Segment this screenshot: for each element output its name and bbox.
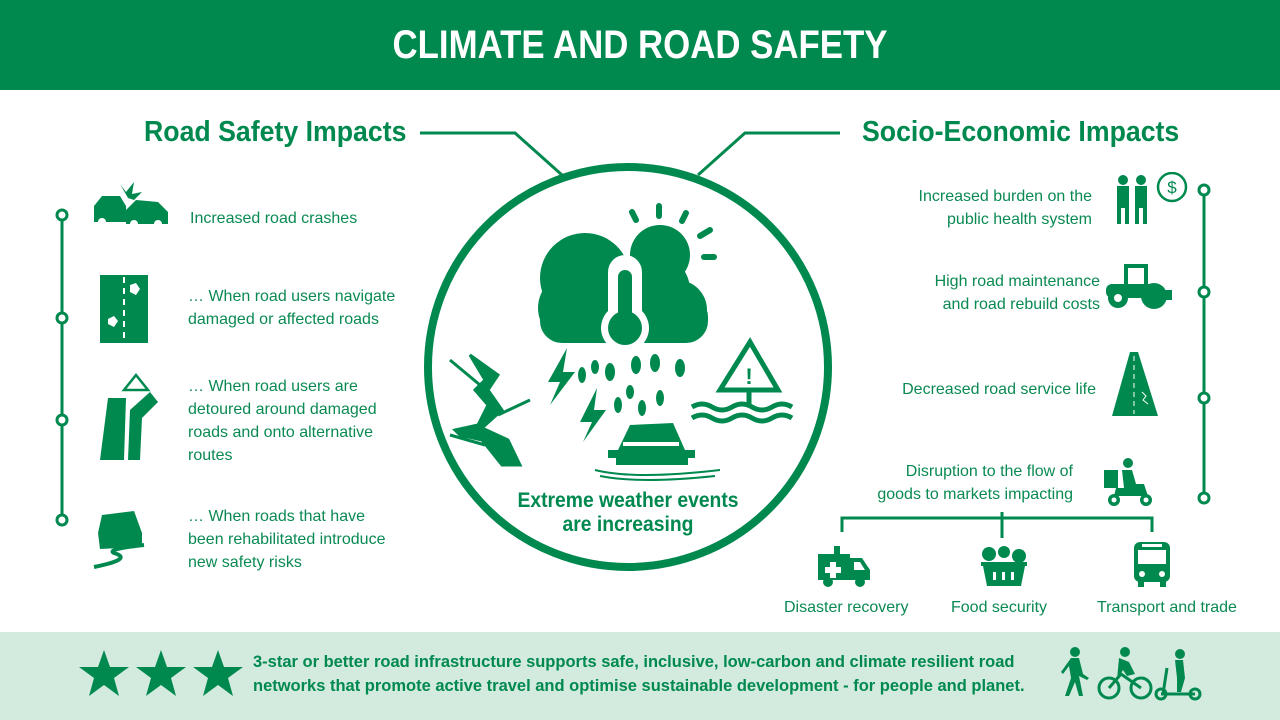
icon: crash bbox=[94, 182, 168, 224]
left item 3: detours bbox=[100, 373, 377, 464]
right item 3: service life bbox=[902, 352, 1158, 416]
heading: socio-economic impacts: Socio-Economic Impacts bbox=[862, 116, 1179, 148]
sub item: transport and trade: Transport and trade bbox=[1097, 599, 1237, 616]
footer text: 3-star or better road infrastructure supports safe, inclusive, low-carbon and climate resilient road bbox=[253, 652, 1014, 671]
left item 4: rehabilitated roads: new safety risks bbox=[188, 554, 302, 571]
header banner bbox=[0, 0, 1280, 90]
right item 4: goods flow bbox=[877, 458, 1152, 506]
caption: are increasing bbox=[563, 513, 693, 536]
right item 4: goods flow: Disruption to the flow of bbox=[906, 463, 1073, 480]
caption: Extreme weather events bbox=[518, 489, 738, 512]
icon: bus bbox=[1134, 542, 1170, 587]
right item 2: maintenance bbox=[935, 264, 1172, 313]
icon: road roller bbox=[1106, 264, 1172, 309]
title: CLIMATE AND ROAD SAFETY bbox=[393, 23, 887, 67]
left item 3: detours: … When road users are bbox=[188, 378, 358, 395]
left item 3: detours: roads and onto alternative bbox=[188, 424, 373, 441]
icon: warning sign and waves bbox=[692, 342, 792, 421]
left item 2: damaged roads: damaged or affected roads bbox=[188, 311, 379, 328]
icon: people and dollar bbox=[1117, 172, 1188, 224]
icon: cracked ground bbox=[450, 355, 530, 465]
icon: car on winding road bbox=[94, 511, 144, 569]
icon: walker cyclist scooter bbox=[1061, 647, 1202, 700]
footer text: networks that promote active travel and optimise sustainable development - for people and planet. bbox=[253, 676, 1025, 695]
caption bbox=[518, 489, 738, 536]
icon: people and dollar: $ bbox=[1167, 178, 1177, 197]
left item 3: detours: routes bbox=[188, 447, 232, 464]
footer text bbox=[253, 652, 1025, 695]
sub item: food security bbox=[951, 546, 1047, 616]
icon: three stars bbox=[79, 650, 243, 696]
icon: cloud with thermometer bbox=[538, 233, 708, 352]
left item 2: damaged roads bbox=[100, 275, 395, 343]
icon: ambulance bbox=[818, 546, 870, 587]
icon: basket of vegetables bbox=[981, 546, 1027, 586]
left item 1: crashes bbox=[94, 182, 357, 227]
left item 4: rehabilitated roads bbox=[94, 508, 385, 571]
sub item: food security: Food security bbox=[951, 599, 1047, 616]
icon: sun bbox=[630, 206, 714, 285]
right item 1: health bbox=[919, 172, 1188, 228]
left item 4: rehabilitated roads: … When roads that have bbox=[188, 508, 365, 525]
right item 4: goods flow: goods to markets impacting bbox=[877, 486, 1073, 503]
footer band bbox=[0, 632, 1280, 720]
left item 3: detours: detoured around damaged bbox=[188, 401, 377, 418]
left item 2: damaged roads: … When road users navigate bbox=[188, 288, 395, 305]
heading: road safety impacts: Road Safety Impacts bbox=[144, 116, 406, 148]
icon: cracked road bbox=[1112, 352, 1158, 416]
sub item: disaster recovery bbox=[784, 546, 908, 616]
icon: road with potholes bbox=[100, 275, 148, 343]
icon: delivery scooter bbox=[1104, 458, 1152, 506]
icon: flooded car bbox=[595, 423, 720, 480]
right item 3: service life: Decreased road service life bbox=[902, 381, 1096, 398]
left item 1: crashes: Increased road crashes bbox=[190, 210, 357, 227]
left item 4: rehabilitated roads: been rehabilitated introduce bbox=[188, 531, 385, 548]
right item 1: health: Increased burden on the bbox=[919, 188, 1092, 205]
right item 2: maintenance: and road rebuild costs bbox=[943, 296, 1100, 313]
central circle: ! bbox=[745, 364, 753, 389]
right item 2: maintenance: High road maintenance bbox=[935, 273, 1100, 290]
sub item: disaster recovery: Disaster recovery bbox=[784, 599, 908, 616]
icon: rain and lightning bbox=[548, 348, 685, 442]
icon: detour road bbox=[100, 373, 158, 460]
right item 1: health: public health system bbox=[947, 211, 1092, 228]
central circle bbox=[424, 163, 832, 571]
sub item: transport and trade bbox=[1097, 542, 1237, 616]
